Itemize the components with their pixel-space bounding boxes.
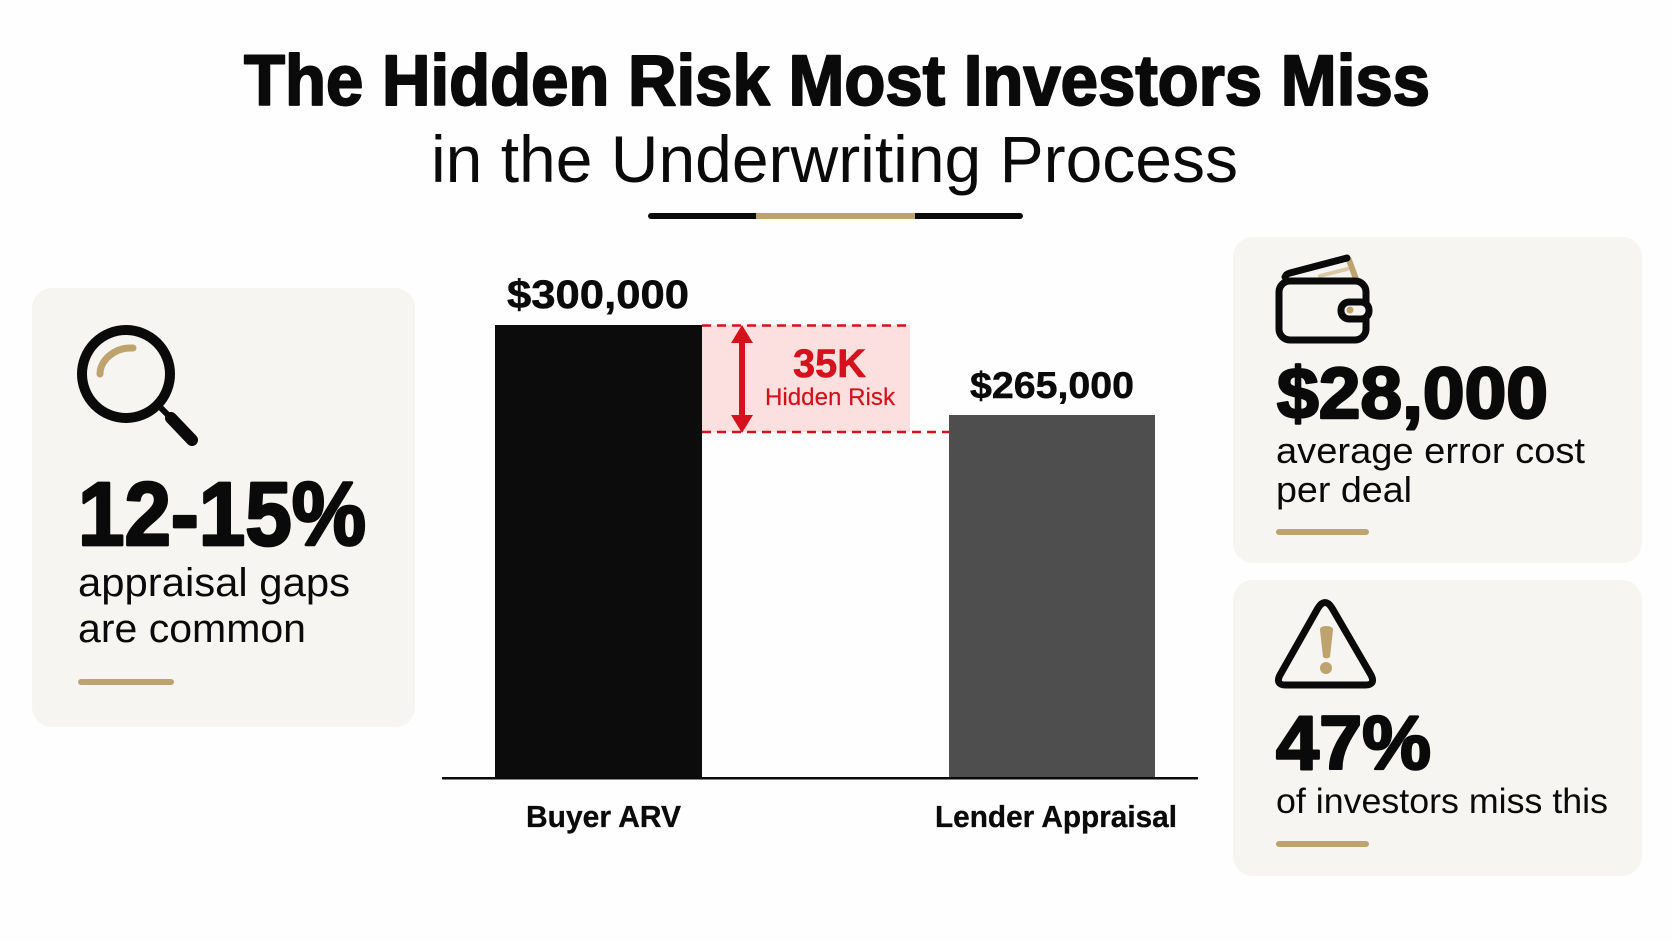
title divider [648,213,1023,219]
stat description: of investors miss this [1276,782,1608,821]
stat: $28,000: $28,000 [1277,354,1548,434]
accent bar [78,679,174,685]
icon: wallet [1279,258,1369,340]
panel: appraisal gaps [32,288,415,727]
label: 35K: 35K [793,342,866,386]
bar: lender appraisal [949,415,1155,778]
stat description: are common [78,607,306,651]
value: $265,000: $265,000 [970,365,1134,406]
value: $300,000: $300,000 [507,273,689,317]
subheading: in the Underwriting Process [431,122,1238,196]
accent bar [1276,529,1369,535]
icon: warning triangle [1278,602,1373,685]
stat description: appraisal gaps [78,561,350,605]
bar: buyer ARV [495,325,702,778]
stat: 47%: 47% [1276,701,1431,786]
axis label: Lender Appraisal: Lender Appraisal [935,799,1177,834]
hidden risk band [701,325,910,432]
stat: 12-15%: 12-15% [78,465,366,565]
stat description: per deal [1276,469,1412,510]
label: Hidden Risk: Hidden Risk [765,384,896,411]
baseline axis [442,777,1198,780]
icon: magnifying glass [82,330,192,440]
arrow: gap [731,325,753,433]
bar chart: ARV vs appraisal [442,273,1198,834]
panel: investors who miss this [1233,580,1642,876]
axis label: Buyer ARV: Buyer ARV [526,799,681,834]
stat description [78,561,350,651]
gap guide lines [702,326,949,432]
accent bar [1276,841,1369,847]
title block [244,42,1430,219]
heading: The Hidden Risk Most Investors Miss [244,42,1430,121]
stat description [1276,430,1585,510]
panel: error cost [1233,237,1642,563]
stat description: average error cost [1276,430,1585,471]
